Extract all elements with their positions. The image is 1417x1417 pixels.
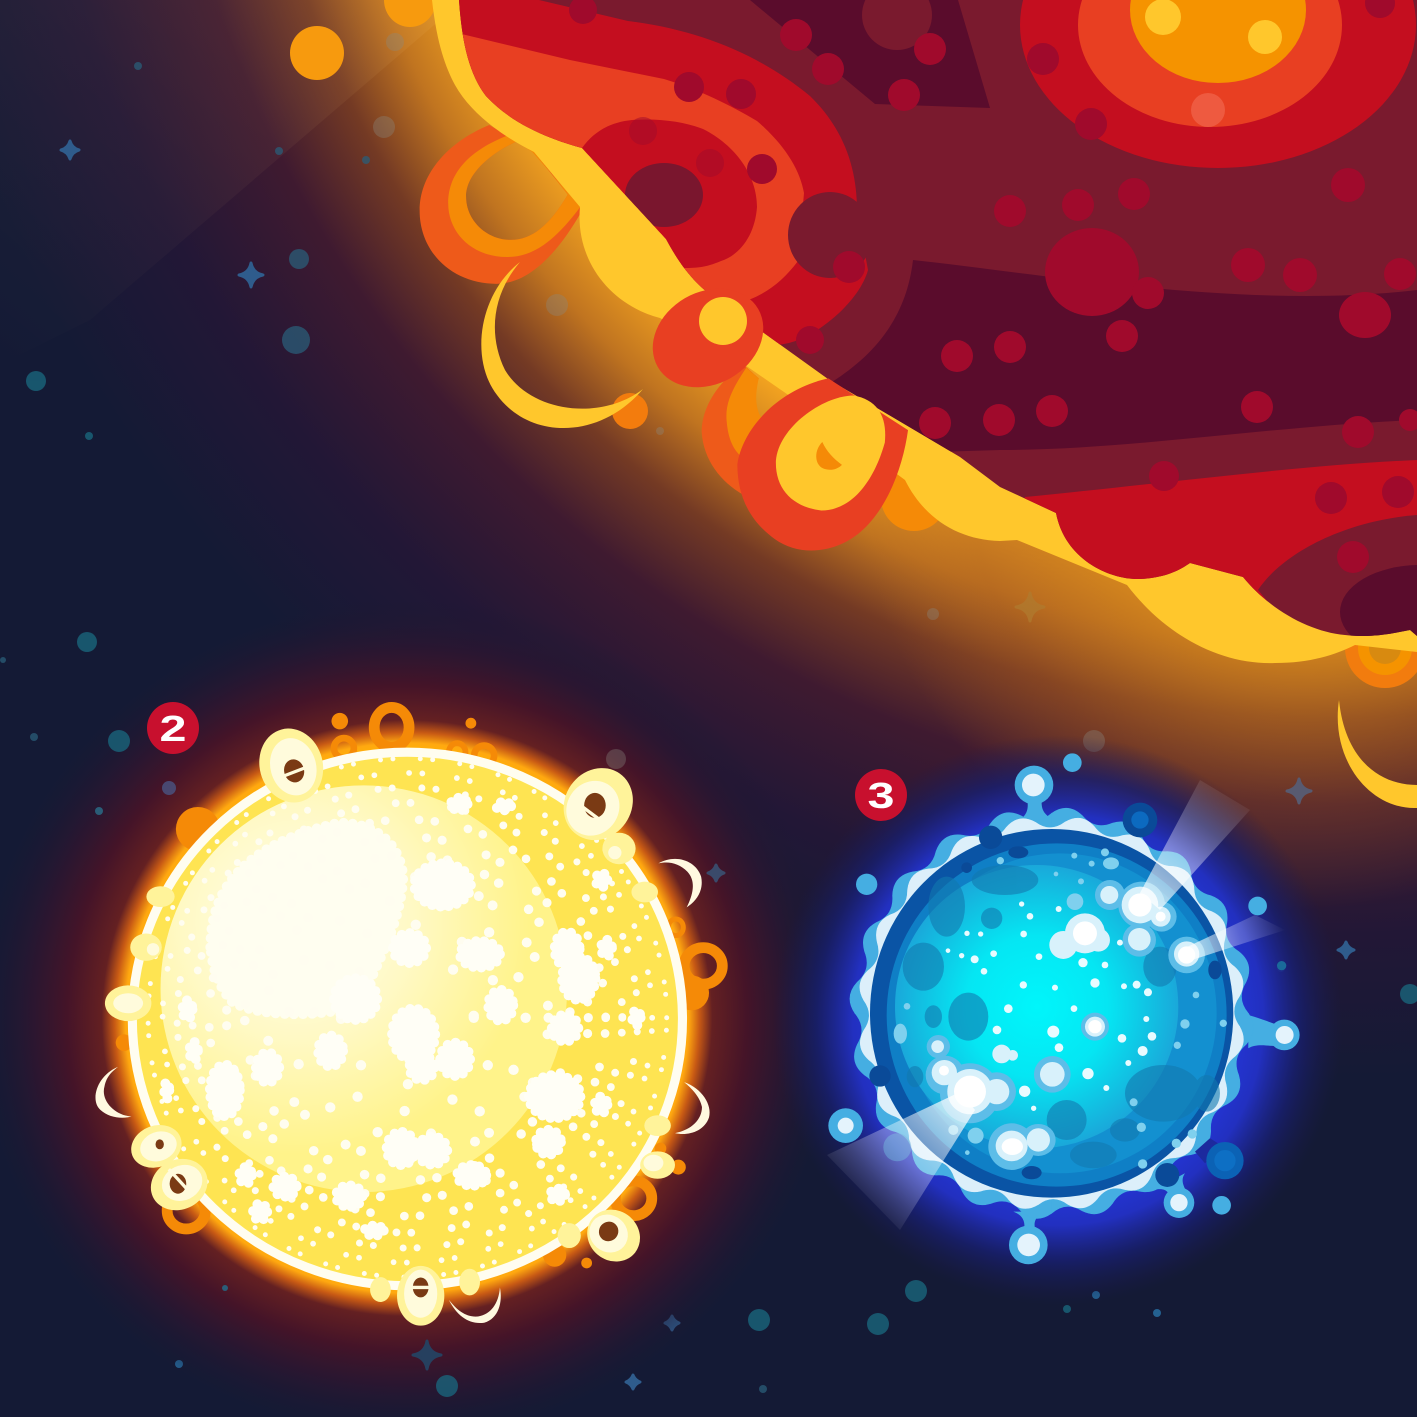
star 3 small dots: [946, 901, 1156, 1111]
star 2 crescents: [95, 859, 710, 1323]
star 3: blue star: [773, 735, 1343, 1305]
star 3 pale dots: [894, 848, 1227, 1169]
large star prominences behind rim: [420, 125, 1417, 688]
star 3 disc: [870, 829, 1233, 1198]
top spiral bands: [440, 0, 868, 360]
crescent flare and ember: [481, 262, 648, 429]
star 3 deep blue blobs: [869, 803, 1244, 1187]
star 2 halo: [0, 598, 837, 1417]
badge 2: 2: [160, 708, 186, 749]
star 2: yellow star: [0, 598, 837, 1417]
crescent flare right edge: [1338, 700, 1417, 808]
star 2 orange loops: [116, 707, 722, 1268]
lower right bands: [1024, 460, 1417, 602]
star 2 disc: [132, 752, 682, 1286]
star 3 gap in rim: [1195, 1138, 1223, 1163]
star 2 dot rings: [148, 758, 667, 1277]
star 3 wavy rim: [845, 804, 1258, 1223]
large star body: [459, 0, 1417, 636]
star 3 halo: [773, 735, 1343, 1305]
star 2 flares: [105, 721, 675, 1326]
top right spiral: [1020, 0, 1416, 168]
dark bands: [750, 0, 1417, 452]
large star yellow rim: [432, 0, 1417, 663]
star 2 dust in front of halo: [95, 730, 724, 1397]
star 3 light beams: [827, 780, 1285, 1230]
star 3 bright clusters: [926, 880, 1205, 1170]
light wedge top left: [0, 0, 440, 365]
badge 2: [147, 702, 199, 754]
star 3 satellites: [828, 753, 1300, 1264]
star 2 white surface blobs: [164, 798, 641, 1236]
surface spots: [569, 0, 1417, 573]
badge 3: 3: [868, 775, 894, 816]
orange ball top left: [290, 0, 436, 80]
star 3 dark patches: [903, 865, 1220, 1168]
badge 3: [855, 769, 907, 821]
large star flares in front: [635, 269, 908, 550]
